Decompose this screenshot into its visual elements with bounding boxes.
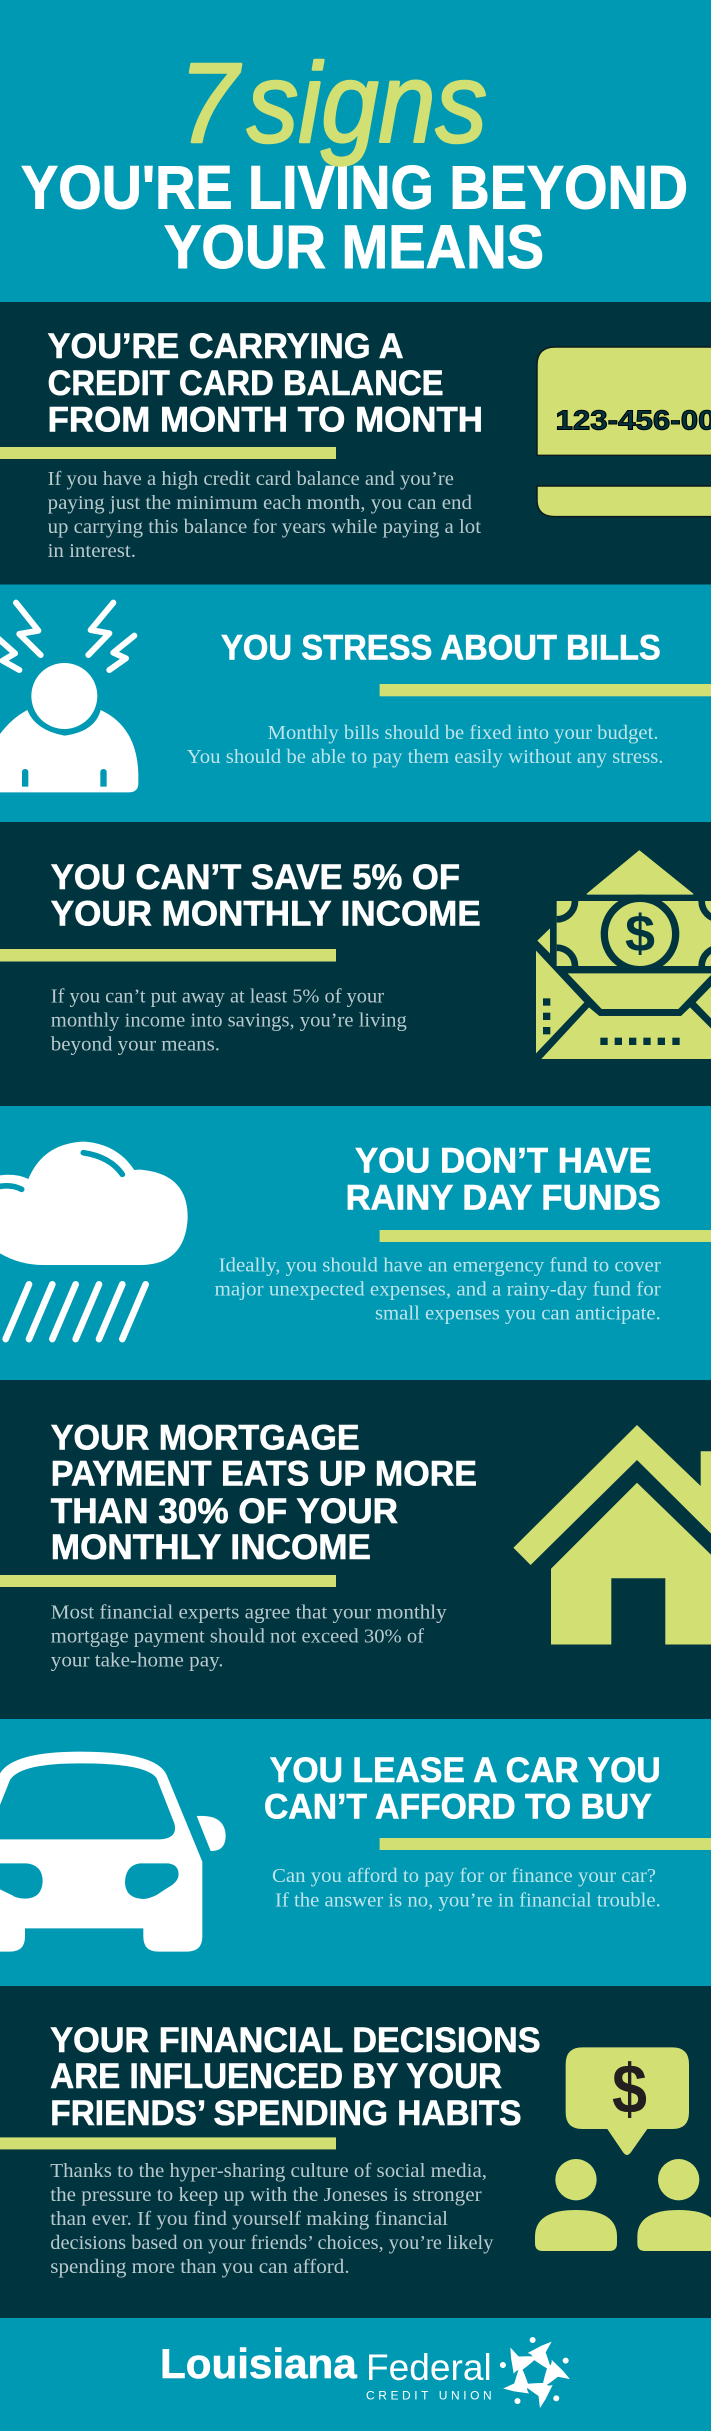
- text: friends description: [50, 2160, 493, 2278]
- text: friends description: than ever. If you find yourself making financial: [50, 2208, 448, 2230]
- heading: you're living beyond your means: YOUR MEANS: [164, 213, 544, 281]
- heading: credit card balance: CREDIT CARD BALANCE: [48, 364, 444, 403]
- text: rainy day description: small expenses you can anticipate.: [375, 1303, 661, 1325]
- icon: envelope with money: $: [625, 905, 655, 963]
- text: car description: If the answer is no, you’re in financial trouble.: [275, 1889, 661, 1911]
- text: credit card description: paying just the minimum each month, you can end: [48, 492, 472, 514]
- text: savings description: monthly income into savings, you’re living: [51, 1010, 407, 1032]
- icon: house: [513, 1425, 711, 1644]
- heading: friends spending habits: FRIENDS’ SPENDING HABITS: [50, 2094, 522, 2133]
- icon: car: [0, 1752, 226, 1952]
- panel: credit card balance: [0, 302, 711, 584]
- heading: you're living beyond your means: [21, 154, 688, 281]
- text: credit card description: If you have a high credit card balance and you’re: [48, 468, 454, 490]
- logo: Louisiana Federal Credit Union: [160, 2337, 574, 2412]
- text: friends description: decisions based on your friends’ choices, you’re likely: [50, 2232, 493, 2254]
- heading: save 5 percent: YOUR MONTHLY INCOME: [51, 895, 481, 934]
- heading: friends spending habits: YOUR FINANCIAL DECISIONS: [50, 2021, 541, 2060]
- heading: mortgage payment: THAN 30% OF YOUR: [51, 1492, 398, 1531]
- icon: envelope with money: [536, 851, 711, 1059]
- text: savings description: If you can’t put away at least 5% of your: [51, 986, 384, 1008]
- icon: rain cloud: [0, 1142, 188, 1339]
- heading: mortgage payment: [51, 1418, 477, 1567]
- heading: credit card balance: FROM MONTH TO MONTH: [48, 401, 483, 440]
- panel: rainy day funds: [0, 1106, 711, 1380]
- heading: mortgage payment: YOUR MORTGAGE: [51, 1418, 360, 1457]
- heading: credit card balance: YOU’RE CARRYING A: [48, 327, 404, 366]
- text: credit card description: up carrying this balance for years while paying a lot: [48, 516, 481, 538]
- heading: friends spending habits: ARE INFLUENCED BY YOUR: [50, 2057, 502, 2096]
- panel: header: [0, 0, 711, 302]
- text: rainy day description: [214, 1254, 661, 1325]
- panel: car lease: [0, 1719, 711, 1986]
- icon: two people with money speech bubble: [535, 2047, 711, 2251]
- icon: credit card: 123-456-00: [556, 404, 711, 435]
- text: rainy day description: major unexpected expenses, and a rainy-day fund for: [214, 1278, 661, 1300]
- panel: save 5 percent: [0, 822, 711, 1106]
- text: car description: Can you afford to pay for or finance your car?: [272, 1865, 656, 1887]
- icon: credit card: [537, 347, 711, 517]
- text: friends description: spending more than you can afford.: [50, 2256, 350, 2278]
- panel: mortgage payment: [0, 1380, 711, 1719]
- heading: mortgage payment: PAYMENT EATS UP MORE: [51, 1455, 477, 1494]
- text: mortgage description: [51, 1602, 447, 1672]
- logo: Louisiana Federal Credit Union: CREDIT UNION: [366, 2388, 492, 2402]
- text: car description: [272, 1865, 661, 1911]
- heading: rainy day funds: YOU DON’T HAVE: [355, 1142, 652, 1181]
- panel: stress about bills: [0, 584, 711, 822]
- icon: stressed person: [0, 603, 138, 792]
- text: rainy day description: Ideally, you should have an emergency fund to cover: [219, 1254, 661, 1276]
- heading: save 5 percent: YOU CAN’T SAVE 5% OF: [51, 858, 460, 897]
- text: mortgage description: Most financial experts agree that your monthly: [51, 1602, 447, 1624]
- text: stress description: Monthly bills should be fixed into your budget.: [268, 722, 658, 744]
- heading: save 5 percent: [51, 858, 481, 934]
- heading: car lease: CAN’T AFFORD TO BUY: [264, 1788, 652, 1827]
- text: credit card description: [48, 468, 481, 562]
- icon: five figures star: [498, 2337, 574, 2412]
- text: savings description: [51, 986, 407, 1056]
- text: friends description: Thanks to the hyper-sharing culture of social media,: [50, 2160, 487, 2182]
- panel: friends spending habits: [0, 1986, 711, 2318]
- heading: credit card balance: [48, 327, 483, 440]
- heading: stress about bills: YOU STRESS ABOUT BILLS: [221, 629, 661, 668]
- logo: Louisiana Federal Credit Union: Federal: [366, 2347, 492, 2388]
- text: mortgage description: mortgage payment should not exceed 30% of: [51, 1626, 424, 1648]
- text: stress description: You should be able to pay them easily without any stress.: [187, 746, 664, 768]
- logo: Louisiana Federal Credit Union: Louisiana: [160, 2340, 357, 2387]
- text: friends description: the pressure to keep up with the Joneses is stronger: [50, 2184, 482, 2206]
- title: 7 signs: signs: [247, 40, 487, 166]
- heading: friends spending habits: [50, 2021, 541, 2133]
- icon: two people with money speech bubble: $: [612, 2050, 647, 2128]
- heading: mortgage payment: MONTHLY INCOME: [51, 1528, 371, 1567]
- text: savings description: beyond your means.: [51, 1034, 220, 1056]
- panel: footer: [0, 2318, 711, 2431]
- heading: rainy day funds: [346, 1142, 661, 1217]
- text: credit card description: in interest.: [48, 540, 136, 562]
- text: stress description: [187, 722, 664, 768]
- heading: car lease: [264, 1751, 661, 1827]
- title: 7 signs: 7: [179, 40, 242, 166]
- heading: car lease: YOU LEASE A CAR YOU: [270, 1751, 661, 1790]
- heading: rainy day funds: RAINY DAY FUNDS: [346, 1178, 661, 1217]
- text: mortgage description: your take-home pay.: [51, 1650, 224, 1672]
